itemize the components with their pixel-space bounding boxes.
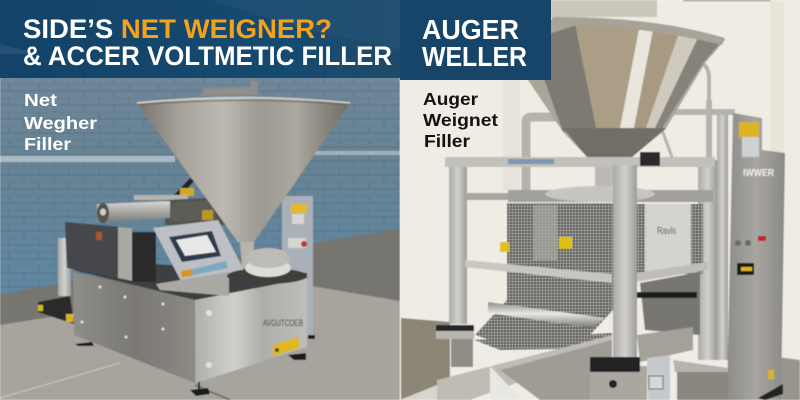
label: net wegher filler: Wegher (24, 113, 97, 133)
frame: left post (449, 167, 467, 324)
machine: left hopper (137, 79, 350, 268)
mesh film panel (475, 203, 613, 345)
machine: dark upper box (65, 222, 156, 282)
rear door panel (637, 204, 703, 274)
header band: right title (400, 0, 551, 80)
keypad (181, 261, 228, 278)
mesh highlights (533, 205, 557, 260)
cabinet brand: IWWER (743, 168, 775, 179)
label: auger weignet filler: Filler (424, 131, 470, 151)
title line one: SIDE’S NET WEIGNER? (23, 14, 332, 44)
machine: control panel (153, 220, 245, 296)
lower right arm (673, 360, 728, 400)
brand text on base: AVGUTCOEB (263, 318, 303, 328)
steel label plate (647, 355, 670, 400)
label: net wegher filler (24, 90, 97, 154)
touch screen (169, 231, 221, 262)
outlet pipes (526, 0, 770, 190)
bottom tray (437, 335, 647, 400)
panel: right auger scene (400, 0, 800, 400)
yellow clamps (500, 237, 572, 252)
label: net wegher filler: Filler (24, 134, 71, 154)
frame: right upper posts (698, 115, 728, 360)
door brand: Ravls (657, 226, 676, 237)
frame: right cabinet (727, 113, 785, 400)
machine: left post and black base (38, 238, 74, 324)
frame: shelf bars (465, 260, 708, 283)
machine: back column (282, 196, 313, 337)
auger title line two: WELLER (422, 41, 527, 72)
machine: round dosing plate (227, 248, 307, 284)
label: auger weignet filler (423, 89, 498, 151)
film roll and lower workings (488, 272, 700, 362)
floor: brown (400, 318, 800, 400)
machine: steel base (73, 262, 307, 383)
frame: top bar (445, 152, 715, 202)
label: auger weignet filler: Weignet (423, 110, 498, 130)
machine: horizontal auger pipe (97, 200, 215, 223)
lower left bracket (436, 325, 612, 367)
label: auger weignet filler: Auger (423, 89, 478, 109)
label: net wegher filler: Net (24, 90, 57, 110)
machine: rear yellow strut (134, 178, 226, 225)
panel: left net weigher scene (0, 60, 400, 400)
frame: centre post (613, 165, 637, 363)
wall: blue brick (0, 60, 400, 305)
right hopper (523, 0, 725, 187)
yellow warning label (273, 337, 299, 356)
machine: feet (75, 335, 315, 396)
title line two: & ACCER VOLTMETIC FILLER (23, 41, 392, 71)
wall: cream room (400, 0, 800, 400)
floor: concrete (0, 229, 400, 400)
auger title line one: AUGER (422, 14, 519, 45)
cabinet controls (735, 236, 766, 275)
header band: left title (0, 0, 400, 78)
